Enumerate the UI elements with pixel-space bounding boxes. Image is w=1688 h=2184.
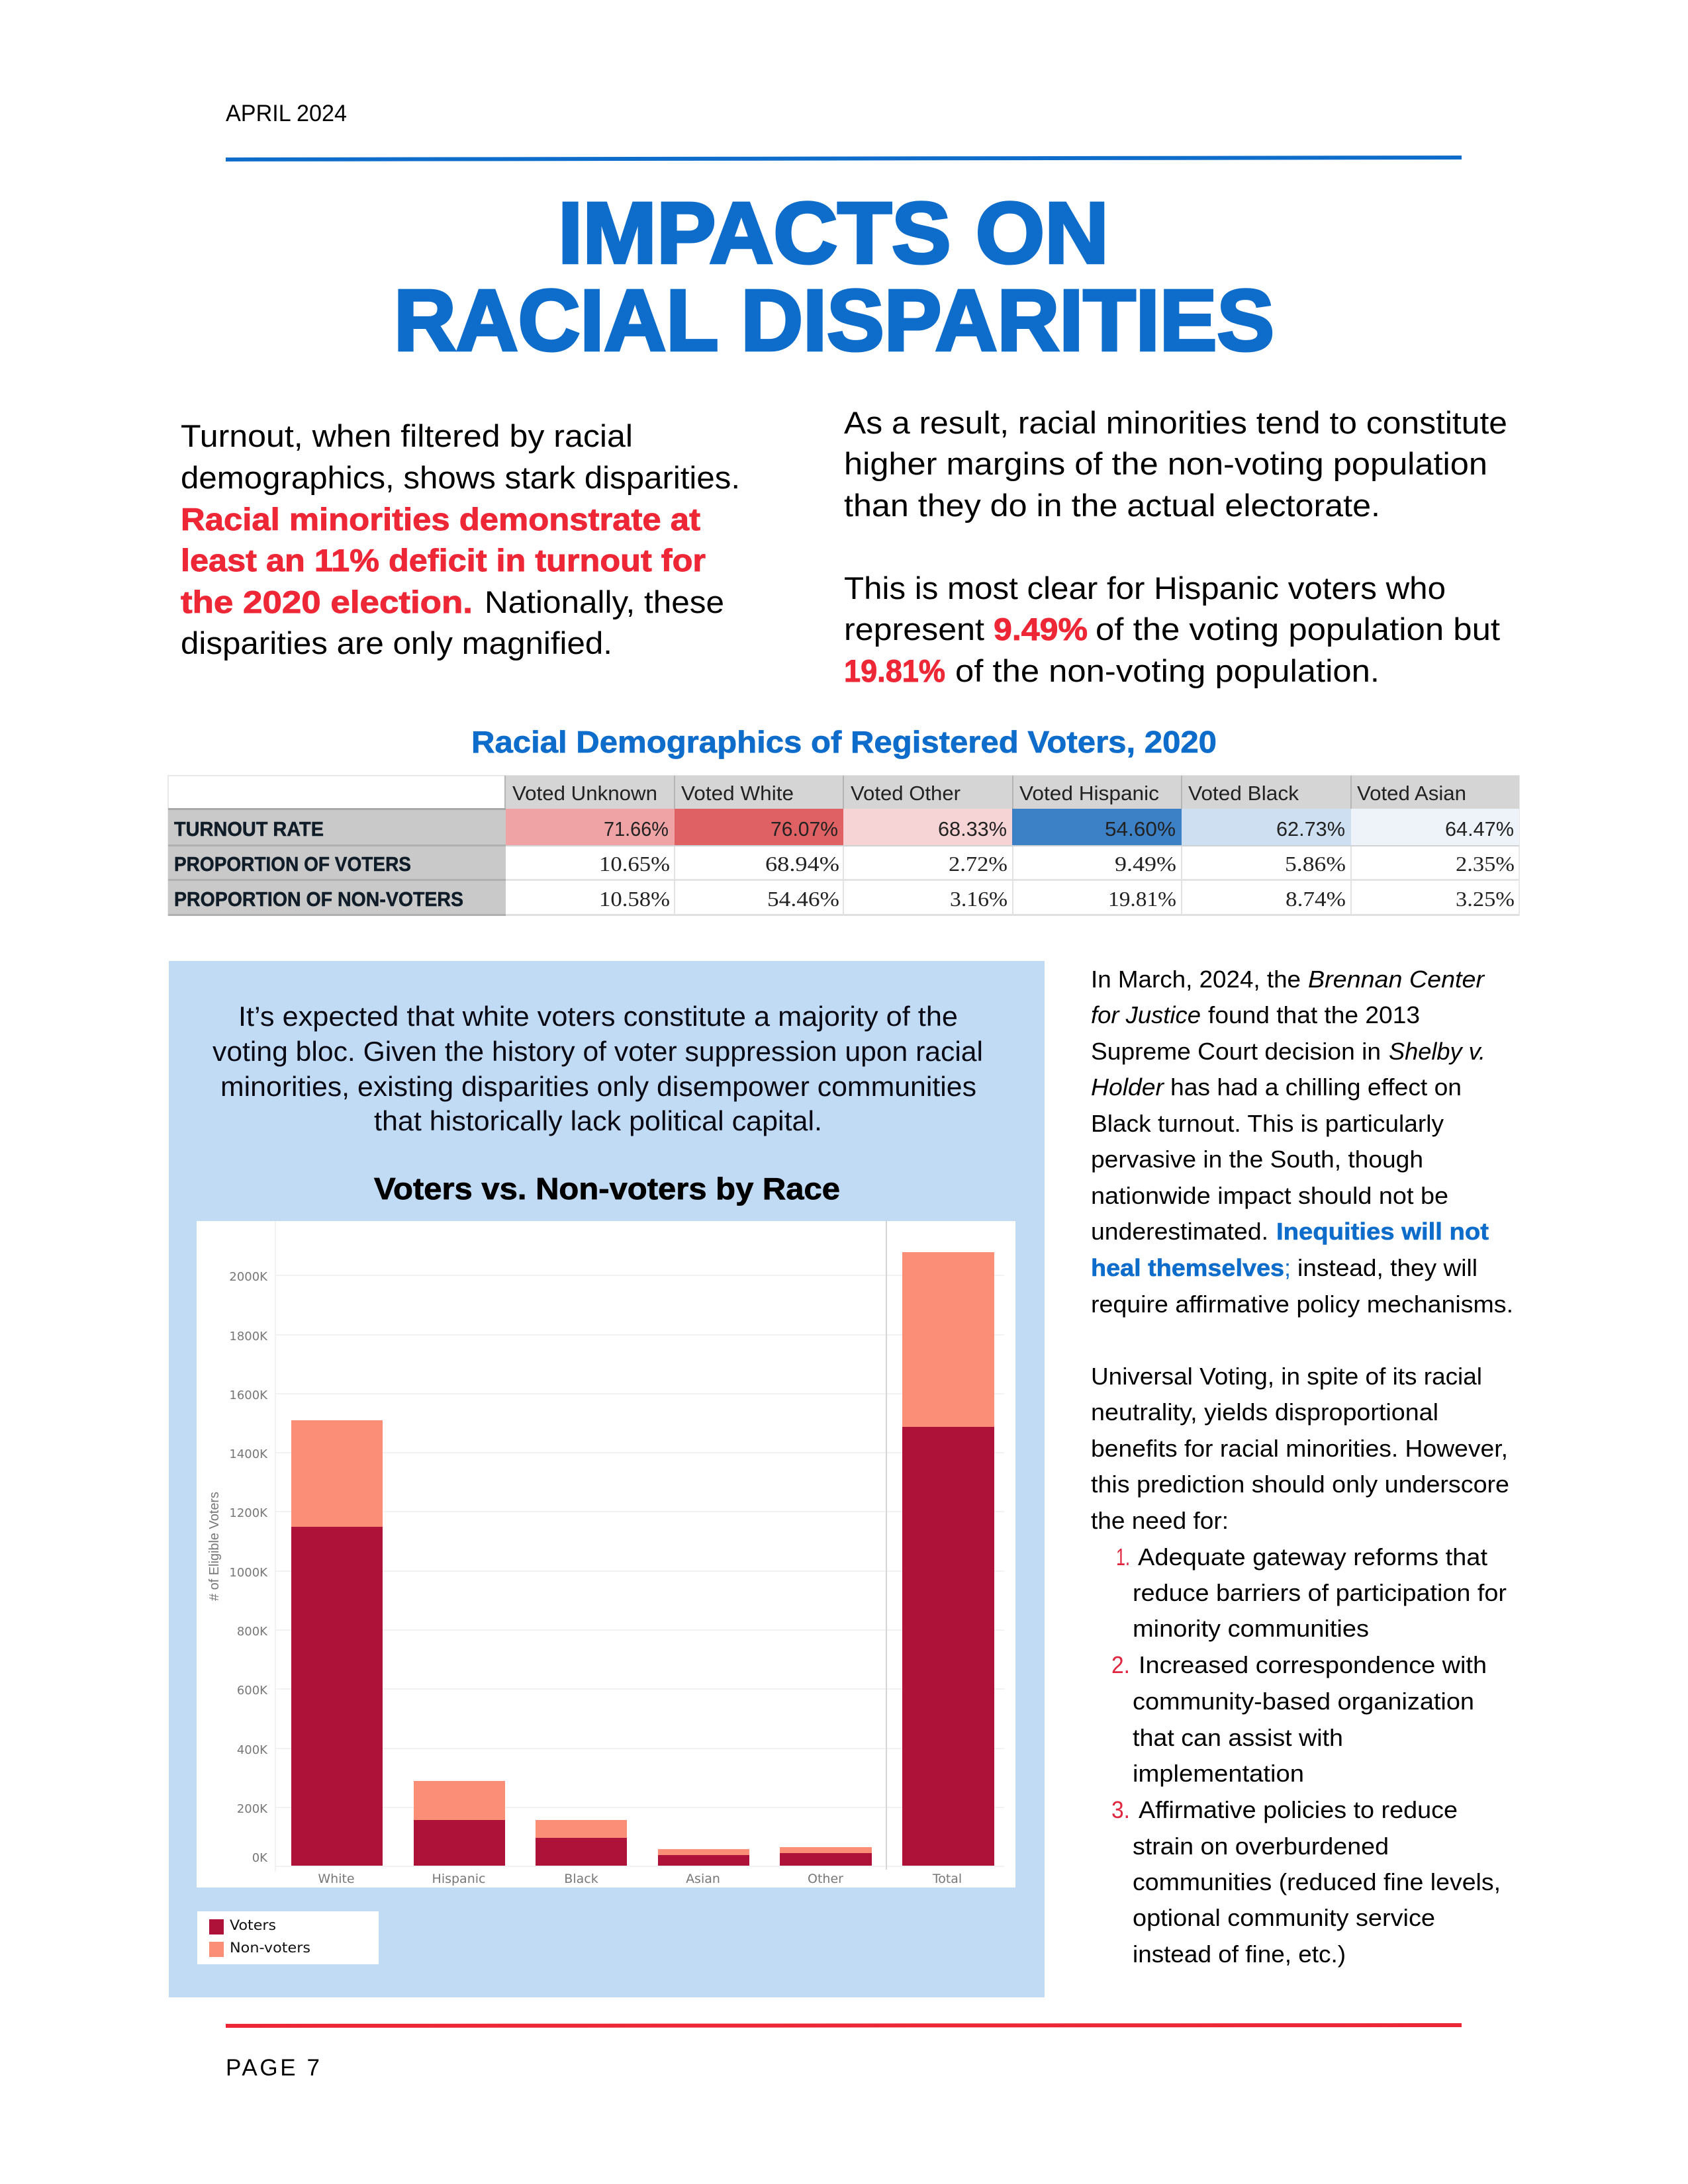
list item 3: instead of fine, etc.)	[1133, 1940, 1346, 1968]
sidebar: Universal Voting text: Universal Voting, in spite of its racial	[1091, 1363, 1482, 1390]
sidebar: Universal Voting text: neutrality, yields disproportional	[1091, 1398, 1438, 1426]
turnout rate heatmap row: 54.60%	[1105, 817, 1176, 841]
sidebar: Brennan Center text: underestimated.	[1091, 1218, 1268, 1245]
y axis labels: 1800K	[229, 1330, 268, 1343]
chart title: Voters vs. Non-voters by Race	[374, 1171, 840, 1206]
stacked bar chart	[197, 1221, 1015, 1888]
table header row: Voted Asian	[1357, 782, 1466, 805]
sidebar: Universal Voting text: the need for:	[1091, 1507, 1229, 1534]
left intro paragraph: Racial minorities demonstrate at	[181, 502, 700, 537]
list item 1: reduce barriers of participation for	[1133, 1579, 1507, 1606]
left intro paragraph: Nationally, these	[485, 584, 724, 619]
sidebar: Brennan Center text: for Justice	[1091, 1001, 1201, 1028]
turnout rate heatmap row: 64.47%	[1445, 817, 1514, 841]
sidebar: Brennan Center text	[1091, 966, 1513, 1318]
x axis labels	[318, 1872, 962, 1886]
left intro paragraph: disparities are only magnified.	[181, 625, 612, 660]
sidebar: Brennan Center text: Black turnout. This is particularly	[1091, 1110, 1444, 1137]
sidebar: Brennan Center text: heal themselves	[1091, 1254, 1284, 1281]
panel text: that historically lack political capital.	[374, 1105, 822, 1136]
row labels: TURNOUT RATE	[174, 817, 324, 841]
y axis labels: 1600K	[229, 1388, 268, 1402]
list item 2: Increased correspondence with	[1139, 1651, 1487, 1678]
right intro paragraph: 19.81%	[844, 653, 945, 688]
table header row: Voted Unknown	[512, 782, 657, 805]
proportion rows	[506, 845, 1519, 916]
left intro paragraph: the 2020 election.	[181, 584, 473, 619]
x axis labels: Hispanic	[432, 1872, 485, 1886]
list item 3: 3.	[1111, 1796, 1130, 1823]
list item 3: optional community service	[1133, 1904, 1435, 1931]
turnout rate heatmap row: 71.66%	[604, 817, 669, 841]
panel: voters vs non-voters	[169, 961, 1045, 1997]
sidebar: Brennan Center text: has had a chilling effect on	[1170, 1073, 1462, 1101]
sidebar: Universal Voting text: this prediction should only underscore	[1091, 1471, 1509, 1498]
page number: PAGE 7	[226, 2055, 320, 2081]
right intro paragraph: 9.49%	[994, 612, 1088, 647]
bar: Black	[536, 1820, 627, 1866]
legend	[197, 1911, 379, 1964]
right intro paragraph: represent	[844, 612, 984, 647]
proportion rows: 5.86%	[1285, 852, 1346, 876]
table heading: Racial Demographics of Registered Voters, 2020	[471, 725, 1217, 759]
turnout rate heatmap row: 62.73%	[1276, 817, 1345, 841]
bar: Asian	[658, 1849, 749, 1866]
sidebar: Universal Voting text	[1091, 1363, 1509, 1534]
sidebar: Brennan Center text: Shelby v.	[1389, 1038, 1485, 1065]
left intro paragraph: demographics, shows stark disparities.	[181, 460, 740, 495]
y axis labels: 600K	[237, 1684, 268, 1698]
sidebar: Brennan Center text: ;	[1284, 1254, 1291, 1281]
list item 3: communities (reduced fine levels,	[1133, 1868, 1501, 1895]
x axis labels: Black	[564, 1872, 598, 1886]
data table	[168, 776, 1519, 916]
x axis labels: Total	[932, 1872, 962, 1886]
list item 2: community-based organization	[1133, 1688, 1474, 1715]
right intro paragraph: higher margins of the non-voting population	[844, 446, 1487, 481]
sidebar: Brennan Center text: Inequities will not	[1276, 1218, 1489, 1245]
panel text: It’s expected that white voters constitute a majority of the	[238, 1001, 958, 1032]
y axis labels: 1000K	[229, 1566, 268, 1580]
table header row: Voted Black	[1188, 782, 1299, 805]
y axis labels: 400K	[237, 1743, 268, 1757]
left intro paragraph: least an 11% deficit in turnout for	[181, 543, 706, 578]
proportion rows: 10.65%	[599, 852, 670, 876]
list item 2: implementation	[1133, 1760, 1304, 1787]
title: RACIAL DISPARITIES	[394, 271, 1274, 369]
bar: Hispanic	[414, 1781, 505, 1866]
right intro paragraph: of the voting population but	[1096, 612, 1500, 647]
y axis labels: 800K	[237, 1625, 268, 1639]
numbered list	[1111, 1543, 1507, 1968]
list item 1: Adequate gateway reforms that	[1138, 1543, 1487, 1570]
y axis labels: 200K	[237, 1802, 268, 1816]
title: IMPACTS ON	[558, 184, 1109, 281]
panel text: minorities, existing disparities only disempower communities	[220, 1071, 976, 1102]
y axis title: # of Eligible Voters	[207, 1492, 222, 1601]
y axis labels	[229, 1270, 268, 1865]
list item 1	[1116, 1543, 1507, 1642]
x axis labels: Asian	[686, 1872, 720, 1886]
turnout rate heatmap row	[506, 809, 1519, 845]
y axis labels: 2000K	[229, 1270, 268, 1284]
y axis labels: 0K	[252, 1851, 268, 1865]
table header row: Voted Hispanic	[1019, 782, 1159, 805]
left intro paragraph	[181, 418, 740, 660]
list item 3: strain on overburdened	[1133, 1833, 1389, 1860]
proportion rows: 8.74%	[1286, 887, 1346, 911]
legend: Non-voters	[230, 1940, 310, 1956]
bar: Total	[902, 1252, 994, 1866]
table header row: Voted White	[681, 782, 794, 805]
proportion rows: 68.94%	[765, 852, 839, 876]
proportion rows: 9.49%	[1115, 852, 1176, 876]
list item 1: 1.	[1116, 1543, 1130, 1570]
row labels	[168, 808, 506, 916]
date header: APRIL 2024	[226, 101, 347, 126]
panel text	[212, 1001, 983, 1136]
x axis labels: White	[318, 1872, 355, 1886]
x axis labels: Other	[808, 1872, 843, 1886]
y axis labels: 1200K	[229, 1506, 268, 1520]
right intro paragraph: of the non-voting population.	[955, 653, 1380, 688]
right intro paragraph: than they do in the actual electorate.	[844, 488, 1380, 523]
panel text: voting bloc. Given the history of voter suppression upon racial	[212, 1036, 983, 1067]
row labels: PROPORTION OF NON-VOTERS	[174, 887, 463, 911]
bar: Other	[780, 1847, 872, 1866]
proportion rows: 3.25%	[1456, 887, 1515, 911]
sidebar: Brennan Center text: instead, they will	[1297, 1254, 1477, 1281]
left intro paragraph: Turnout, when filtered by racial	[181, 418, 633, 453]
y axis labels: 1400K	[229, 1447, 268, 1461]
proportion rows: 3.16%	[950, 887, 1008, 911]
row labels: PROPORTION OF VOTERS	[174, 852, 411, 876]
bar: White	[291, 1420, 383, 1866]
turnout rate heatmap row: 76.07%	[771, 817, 838, 841]
right intro paragraph	[844, 405, 1507, 688]
sidebar: Brennan Center text: Brennan Center	[1308, 966, 1485, 993]
list item 2: that can assist with	[1133, 1724, 1343, 1751]
sidebar: Brennan Center text: Supreme Court decision in	[1091, 1038, 1381, 1065]
legend: Voters	[230, 1917, 276, 1933]
table header row: Voted Other	[851, 782, 961, 805]
sidebar: Brennan Center text: found that the 2013	[1208, 1001, 1420, 1028]
right intro paragraph: As a result, racial minorities tend to constitute	[844, 405, 1507, 440]
table header row	[504, 776, 1519, 809]
list item 2	[1111, 1651, 1487, 1787]
sidebar: Brennan Center text: Holder	[1091, 1073, 1165, 1101]
list item 2: 2.	[1111, 1651, 1130, 1678]
sidebar: Brennan Center text: nationwide impact should not be	[1091, 1182, 1448, 1209]
sidebar: Brennan Center text: In March, 2024, the	[1091, 966, 1301, 993]
right intro paragraph: This is most clear for Hispanic voters who	[844, 570, 1446, 606]
list item 3: Affirmative policies to reduce	[1139, 1796, 1458, 1823]
proportion rows: 2.35%	[1456, 852, 1515, 876]
title	[394, 184, 1274, 369]
proportion rows: 19.81%	[1108, 887, 1176, 911]
turnout rate heatmap row: 68.33%	[938, 817, 1007, 841]
sidebar: Brennan Center text: pervasive in the South, though	[1091, 1146, 1423, 1173]
list item 3	[1111, 1796, 1501, 1968]
list item 1: minority communities	[1133, 1615, 1369, 1642]
proportion rows: 2.72%	[949, 852, 1008, 876]
proportion rows: 10.58%	[599, 887, 670, 911]
proportion rows: 54.46%	[767, 887, 839, 911]
sidebar: Universal Voting text: benefits for racial minorities. However,	[1091, 1435, 1508, 1462]
sidebar: Brennan Center text: require affirmative policy mechanisms.	[1091, 1291, 1513, 1318]
